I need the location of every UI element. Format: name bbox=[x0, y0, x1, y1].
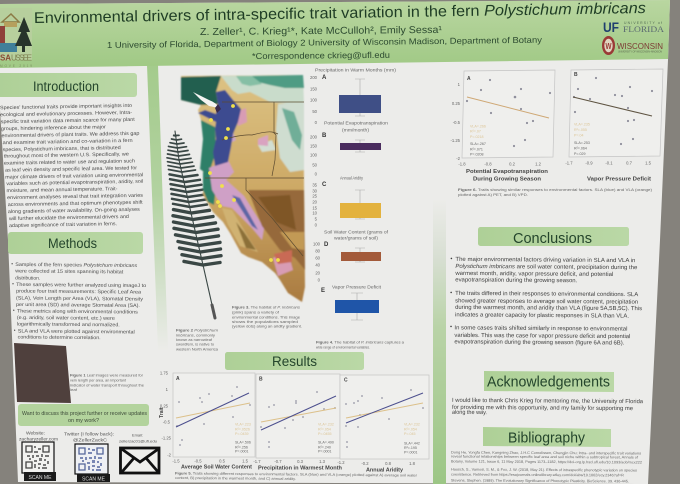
text block: introduction: along gradients of water availability. On-going analyses bbox=[8, 207, 140, 215]
text block: acknowledgements: along the way. bbox=[452, 410, 487, 416]
panel A: A bbox=[467, 76, 471, 82]
correspondence: *Correspondence ckrieg@ufl.edu bbox=[252, 50, 390, 61]
text block: methods: (SLA), Vein Length per Area (VLA), Stomatal Density bbox=[16, 295, 144, 303]
figure 2: fern illustration bbox=[167, 131, 221, 318]
x axis ticks: 0.2 bbox=[509, 162, 516, 166]
text block: bibliography: coexistence. Retrieved from https://esajournals.onlinelibrary.wiley.com/doi/abs/10.1002/ecy.2346?af=R bbox=[451, 473, 624, 477]
box plot D: soil water: 80 bbox=[315, 248, 321, 254]
box plot B: PET: 150 bbox=[310, 144, 318, 148]
panel A: SLA=.506 bbox=[235, 440, 251, 444]
panel B bbox=[256, 374, 340, 458]
x axis ticks: -1.7 bbox=[565, 160, 573, 166]
x axis ticks: -1.8 bbox=[458, 162, 466, 166]
figure 1 caption: Figure 1 Leaf images were measured for bbox=[70, 374, 144, 378]
x axis ticks: -0.8 bbox=[484, 162, 492, 166]
figure 5 caption: Figure 5. Traits showing different responses to environmental factors. SLA (blue) and VLA (orange) plotted against A) average soil water bbox=[175, 471, 418, 478]
text block: acknowledgements: I would like to thank Chris Krieg for mentoring me, the University of Florida bbox=[452, 398, 644, 405]
box plot C: aridity: 20 bbox=[312, 200, 318, 204]
panel A: VLA=.266 bbox=[470, 124, 486, 128]
text block: conclusions: The major environmental factors driving variation in SLA and VLA in bbox=[455, 257, 635, 264]
x axis ticks: -0.9 bbox=[585, 160, 593, 166]
heading: Results bbox=[225, 352, 364, 370]
figure 6 caption bbox=[458, 188, 652, 197]
panel C: P=.045 bbox=[404, 432, 416, 436]
text block: methods: (e.g. aridity, soil water content, etc.) were bbox=[17, 315, 115, 322]
box plot D: soil water: 40 bbox=[315, 262, 321, 268]
figure 4 caption bbox=[316, 340, 404, 350]
panel A: VLA=.223 bbox=[235, 422, 251, 426]
figure 2 caption: imbricans , commonly bbox=[176, 334, 215, 338]
box plot C: aridity: 25 bbox=[312, 194, 318, 198]
x axis ticks: -1.7 bbox=[253, 459, 261, 464]
text block: introduction: environmental drivers of plant traits. We address this gap bbox=[1, 131, 140, 139]
panel B: P=.029 bbox=[574, 152, 586, 156]
panel C: P=.0001 bbox=[404, 450, 418, 454]
box plot D: soil water bbox=[313, 230, 389, 282]
text block: methods: were collected at 15 sites spanning its habitat bbox=[15, 268, 124, 275]
figure 3 caption: (yellow dots) along an aridity gradient. bbox=[232, 324, 302, 328]
website label bbox=[19, 430, 58, 442]
pink habitat bbox=[209, 160, 264, 240]
email label: Email: bbox=[132, 432, 143, 438]
puget sound bbox=[193, 92, 219, 108]
box plot D: soil water: 0 bbox=[318, 278, 321, 282]
heading: Conclusions bbox=[478, 227, 629, 247]
text block: introduction: groups, hindering inference about the major bbox=[1, 124, 106, 132]
text block: methods: logarithmically transformed and normalized. bbox=[17, 321, 120, 328]
text block: bibliography: Stevens, Stephen. (1989). The Evolutionary Significance of Phenotypic Plasticity. BioScience. 39. 436-445. bbox=[451, 479, 629, 483]
twitter label: @ZellerZackC bbox=[73, 438, 108, 442]
figure 4 caption: Figure 4. The habitat of P. imbricans captures a bbox=[316, 340, 404, 344]
panel A: P=.0001 bbox=[235, 450, 248, 454]
website label: zacharyzeller.com bbox=[19, 436, 58, 442]
pale high plateau bbox=[276, 102, 304, 172]
heading: Bibliography: Bibliography bbox=[508, 430, 586, 446]
box plot D: soil water: 60 bbox=[315, 256, 321, 260]
Wisconsin logo: UNIVERSITY OF WISCONSIN–MADISON bbox=[618, 50, 662, 54]
QR code twitter bbox=[75, 444, 110, 482]
header band bbox=[0, 0, 670, 68]
website label: Website: bbox=[26, 430, 45, 436]
figure 3 caption: Figure 3. The habitat of P. imbricans bbox=[232, 306, 300, 310]
figure 3 caption: (pink) spans a variety of bbox=[232, 310, 279, 314]
x axis titles: Vapor Pressure Deficit bbox=[587, 176, 651, 182]
green column stripe right bbox=[433, 200, 446, 484]
panel C: R²=.195 bbox=[404, 446, 417, 450]
panel A: R²=.256 bbox=[235, 446, 248, 450]
x axis ticks: 0.7 bbox=[626, 160, 633, 166]
text block: conclusions: evapotranspiration during the growing season (figure 6A and 6B). bbox=[454, 339, 625, 347]
Wisconsin logo bbox=[602, 36, 663, 55]
text block: introduction: and examine trait variation and co-variation in a fern bbox=[3, 138, 133, 146]
x axis ticks: 0.5 bbox=[219, 458, 226, 464]
figure 5: trait regressions bbox=[159, 370, 429, 474]
panel B: SLA=.253 bbox=[574, 141, 590, 145]
green column stripe left bbox=[147, 65, 168, 350]
x axis titles: During Growing Season bbox=[473, 176, 541, 182]
figure 1 caption: vein length per area, an important bbox=[70, 378, 126, 382]
text block: methods: These samples were further analyzed using imageJ to bbox=[16, 282, 146, 289]
text block: conclusions: variables. This was the case for vapor pressure deficit and potential bbox=[454, 333, 630, 340]
box plot B: PET bbox=[310, 120, 389, 176]
y axis: Trait bbox=[159, 407, 165, 418]
email label: zellerzac01@ufl.edu bbox=[119, 438, 157, 444]
box plot D: soil water: 20 bbox=[315, 270, 321, 276]
text block: conclusions: • bbox=[450, 256, 452, 262]
panel A: R²=.07 bbox=[470, 130, 481, 134]
figure 2 caption: swordfern, is native to bbox=[176, 342, 214, 346]
conference logo: USSEE bbox=[11, 54, 32, 62]
y axis: -0.5 bbox=[453, 120, 461, 125]
state borders bbox=[205, 102, 304, 256]
box plot D: soil water: Soil Water Content (grams of bbox=[324, 230, 389, 234]
box plot A: precipitation: 150 bbox=[310, 86, 318, 92]
y axis: 1.75 bbox=[160, 370, 169, 376]
box plot E: VPD: Vapor Pressure Deficit bbox=[332, 284, 382, 290]
text block: acknowledgements: for providing me with this opportunity, and my family for supporting me bbox=[452, 405, 633, 412]
conference logo: SA bbox=[0, 54, 11, 62]
UF logo: UNIVERSITY of bbox=[624, 21, 662, 25]
x axis ticks: -0.5 bbox=[194, 458, 202, 464]
figure 2 caption: Figure 2 Polystichum bbox=[176, 328, 218, 332]
x axis ticks: 0.3 bbox=[297, 459, 304, 464]
y axis: 1 bbox=[166, 387, 169, 392]
text block: introduction: will further elucidate the environmental drivers and bbox=[9, 214, 129, 222]
figure 3 caption: environmental conditions. This image bbox=[232, 316, 300, 320]
x axis ticks: 1.3 bbox=[319, 459, 326, 464]
panel A bbox=[462, 70, 555, 158]
panel B: R²=.064 bbox=[574, 146, 587, 150]
text block: introduction: throughout most of the western U.S. Specifically, we bbox=[4, 151, 129, 160]
text block: acknowledgements bbox=[452, 398, 644, 417]
text block: introduction: examine traits related to water use and regulation such bbox=[4, 158, 135, 167]
x axis ticks: 1.8 bbox=[409, 461, 416, 466]
x axis ticks: -0.7 bbox=[274, 459, 282, 464]
text block: conclusions: • bbox=[450, 290, 452, 296]
panel A: R²=.0526 bbox=[235, 428, 250, 432]
navy wet habitat bbox=[198, 90, 241, 166]
text block: methods: Samples of the fern species Polystichum imbricans bbox=[15, 262, 138, 269]
figure 4 caption: wide range of environmental variables. bbox=[316, 346, 370, 350]
box plot A: precipitation: 200 bbox=[310, 75, 318, 80]
text block: conclusions: during the warmest month, and aridity than VLA (figure 5A,5B,5C). This bbox=[455, 305, 642, 312]
x axis titles: Average Soil Water Content bbox=[181, 464, 252, 470]
figure 5 caption: content, B) precipitation in the warmest month, and C) annual aridity. bbox=[175, 476, 296, 481]
figure 2 caption bbox=[176, 328, 218, 352]
panel B: P=.0001 bbox=[318, 450, 332, 454]
x axis ticks: 1.5 bbox=[242, 458, 249, 464]
panel B: P=.04 bbox=[574, 134, 584, 138]
northern montane teal bbox=[251, 75, 304, 88]
y axis: -2 bbox=[167, 452, 172, 458]
panel A: P=.0218 bbox=[470, 135, 484, 139]
panel B: R²=.055 bbox=[574, 128, 587, 132]
box plot B: PET: 200 bbox=[310, 134, 318, 140]
figure 6 caption: plotted against A) PET, and B) VPD. bbox=[458, 193, 528, 197]
panel A: SLA=.267 bbox=[470, 142, 486, 146]
text block: introduction: major climate drivers of trait variation using environmental bbox=[5, 172, 143, 181]
x axis ticks: -0.2 bbox=[361, 461, 369, 466]
text block: conclusions: Polystichum imbricans are soil water content, precipitation during the bbox=[455, 264, 637, 271]
box plot D: soil water: water/grams of soil) bbox=[334, 236, 379, 240]
panel C bbox=[340, 375, 429, 459]
figure 1 caption bbox=[70, 374, 144, 392]
text block: introduction: species, Polystichum imbricans, that is distributed bbox=[3, 145, 121, 153]
text block: introduction: Species' functional traits provide important insights into bbox=[0, 103, 132, 111]
conference logo: MOVE 2019 bbox=[0, 64, 32, 68]
heading: Methods bbox=[8, 232, 143, 254]
email label bbox=[119, 432, 157, 444]
text block: methods: • bbox=[12, 281, 14, 287]
box plot C: aridity: C bbox=[322, 182, 327, 188]
twitter label: Twitter (I follow back): bbox=[64, 432, 114, 436]
text block: bibliography bbox=[451, 451, 642, 484]
twitter label bbox=[64, 432, 114, 442]
box plot C: aridity bbox=[312, 176, 381, 228]
text block: conclusions: • bbox=[450, 324, 452, 330]
figure 3 caption bbox=[232, 306, 302, 328]
x axis ticks bbox=[172, 458, 416, 466]
figure 2 caption: known as narrowleaf bbox=[176, 338, 212, 342]
panel B: B bbox=[259, 376, 263, 382]
text block: introduction: adaptive significance of trait variation in ferns. bbox=[9, 221, 117, 229]
y axis: 0.25 bbox=[160, 404, 169, 408]
x axis titles: Precipitation in Warmest Month bbox=[258, 466, 342, 472]
figure 6: similar responses bbox=[450, 69, 663, 182]
figure 5 caption bbox=[175, 471, 418, 482]
callout: want to discuss: on my work? bbox=[68, 418, 99, 424]
figure 1: leaf image bbox=[14, 343, 71, 403]
box plot A: precipitation bbox=[310, 68, 397, 125]
pale northern margin bbox=[221, 75, 304, 105]
figure 1 caption: indicator of water transport throughout the bbox=[70, 384, 144, 388]
x axis ticks bbox=[458, 160, 652, 166]
text block: methods: conditions to determine correlation. bbox=[18, 334, 101, 341]
box plot E: VPD: E bbox=[321, 288, 325, 294]
text block: methods: These metrics along with environmental conditions bbox=[17, 308, 138, 316]
box plot B: PET: Potential Evapotranspiration bbox=[324, 120, 389, 126]
text block: methods: • bbox=[14, 328, 16, 334]
x axis ticks: -1.5 bbox=[172, 458, 180, 464]
heading: Introduction: Introduction bbox=[33, 79, 99, 94]
panel B: VLA=.232 bbox=[318, 422, 334, 426]
panel B: SLA=.490 bbox=[318, 440, 334, 444]
panel C: C bbox=[344, 378, 348, 384]
heading: Acknowledgements: Acknowledgements bbox=[487, 374, 610, 390]
callout: want to discuss bbox=[18, 404, 149, 426]
UF logo: UF bbox=[603, 19, 619, 35]
UF logo: FLORIDA bbox=[623, 24, 665, 34]
text block: conclusions: The traits differed in their responses to environmental conditions. SLA bbox=[455, 291, 638, 298]
box plot D: soil water: 100 bbox=[313, 242, 321, 246]
figure 2 caption: western North America bbox=[176, 348, 218, 352]
text block: methods: produce four trait measurements: Specific Leaf Area bbox=[16, 288, 141, 296]
x axis ticks: -1.2 bbox=[337, 460, 345, 465]
Wisconsin logo: W bbox=[606, 42, 612, 51]
box plot B: PET: B bbox=[322, 133, 327, 139]
text block: introduction: across environments and that optimum phenotypes shift bbox=[8, 200, 143, 208]
panel C: VLA=.232 bbox=[404, 422, 420, 426]
box plot C: aridity: Annual Aridity bbox=[340, 176, 364, 180]
text block: introduction: variables such as potential evapotranspiration, aridity, soil bbox=[6, 179, 143, 187]
title: Environmental drivers of intra-specific trait variation in the fern Polystichum imbricans bbox=[34, 0, 646, 27]
affiliations: 1 University of Florida, Department of Biology 2 University of Wisconsin Madison, Department of Botany bbox=[107, 35, 543, 50]
text block: conclusions: evapotranspiration during the growing season. bbox=[455, 277, 578, 284]
text block: bibliography: Botany, Volume 121, Issue 6, 11 May 2018, Pages 1173–1182, https://doi-org.lp.hscl.ufl.edu/10.1093/aob/mcx222 bbox=[451, 460, 642, 465]
figure 3: habitat map bbox=[181, 75, 305, 302]
text block: methods: distribution. bbox=[15, 275, 40, 282]
text block: introduction: ecological and evolutionary processes. However, Intra- bbox=[0, 110, 133, 118]
box plot B: PET: 50 bbox=[312, 162, 318, 168]
box plot B: PET: 0 bbox=[315, 172, 318, 176]
y axis bbox=[450, 82, 461, 161]
x axis titles: Potential Evapotranspiration bbox=[466, 169, 548, 175]
box plot B: PET: (mm/month) bbox=[342, 128, 370, 132]
y axis bbox=[159, 370, 172, 458]
figure 3 caption: shows the populations sampled bbox=[232, 320, 298, 324]
panel B: VLA=.235 bbox=[574, 122, 590, 126]
box plot A: precipitation: A bbox=[322, 75, 327, 81]
land base bbox=[181, 75, 305, 302]
x axis titles: Annual Aridity bbox=[366, 468, 403, 474]
panel B: B bbox=[574, 72, 578, 78]
y axis: -1.25 bbox=[161, 436, 172, 440]
panel A bbox=[173, 373, 255, 457]
box plot A: precipitation: 50 bbox=[312, 109, 318, 114]
text block: bibliography: reveal functional relationships between specific leaf area and soil niche within a subtropical forest, Annals of bbox=[451, 455, 638, 459]
panel C: R²=.054 bbox=[404, 428, 417, 432]
heading: Bibliography bbox=[483, 427, 611, 447]
figure 6 caption: Figure 6. Traits showing similar responses to environmental factors. SLA (blue) and VLA (orange) bbox=[458, 188, 652, 192]
panel B: P=.0455 bbox=[318, 432, 332, 436]
QR code website: SCAN ME bbox=[28, 475, 52, 481]
heading: Methods: Methods bbox=[48, 236, 97, 251]
text block: introduction: environment analyses reveal that trait integration varies bbox=[7, 193, 144, 201]
figure 4: environmental box plots bbox=[310, 68, 397, 320]
box plot D: soil water: D bbox=[324, 242, 329, 248]
QR code website bbox=[22, 442, 56, 481]
text block: methods: SLA and VLA were plotted against environmental bbox=[18, 328, 135, 335]
panel B: R²=.054 bbox=[318, 428, 331, 432]
Wisconsin logo: WISCONSIN bbox=[617, 42, 663, 51]
y axis: 0.25 bbox=[452, 101, 461, 106]
box plot A: precipitation: Precipitation in Warm Months (mm) bbox=[315, 68, 397, 72]
box plot C: aridity: 10 bbox=[312, 210, 318, 216]
y axis: -2 bbox=[456, 156, 461, 161]
x axis titles bbox=[181, 464, 403, 474]
text block: methods bbox=[11, 261, 147, 342]
box plot A: precipitation: 0 bbox=[315, 120, 318, 125]
box plot C: aridity: 5 bbox=[315, 216, 318, 222]
box plot C: aridity: 35 bbox=[312, 182, 318, 188]
y axis: -1.25 bbox=[450, 138, 461, 143]
heading: Introduction bbox=[0, 73, 137, 97]
box plot C: aridity: 0 bbox=[315, 222, 318, 228]
x axis ticks: -0.1 bbox=[605, 160, 613, 166]
central valley and southwest desert bbox=[222, 208, 258, 252]
text block: conclusions: showed greater responses to average soil water content, precipitation bbox=[455, 298, 638, 306]
panel A: P=.0439 bbox=[235, 432, 248, 436]
authors: Z. Zeller¹, C. Krieg¹*, Kate McCulloh², Emily Sessa¹ bbox=[200, 25, 443, 38]
text block: conclusions: indicates a greater capacity for plastic responses in SLA than VLA. bbox=[455, 312, 629, 320]
x axis ticks: 1.2 bbox=[535, 162, 542, 166]
heading: Results: Results bbox=[272, 353, 317, 369]
text block: introduction bbox=[0, 103, 144, 229]
QR code twitter: SCAN ME bbox=[82, 476, 106, 482]
text block: methods: • bbox=[11, 261, 13, 267]
panel A: R²=.071 bbox=[470, 148, 483, 152]
panel B: R²=.240 bbox=[318, 446, 331, 450]
x axis ticks: 1.5 bbox=[645, 160, 652, 166]
panel A: P=.0208 bbox=[470, 152, 484, 156]
text block: conclusions: In some cases traits shifted similarly in response to environmental bbox=[454, 325, 627, 333]
box plot C: aridity: 30 bbox=[312, 188, 318, 194]
panel C: SLA=.442 bbox=[404, 442, 420, 446]
icon: email envelope bbox=[120, 448, 159, 473]
text block: introduction: specific trait variation data remain scarce for many plant bbox=[1, 117, 135, 125]
figure 1 caption: leaf bbox=[70, 388, 77, 392]
x axis ticks: 0.8 bbox=[385, 461, 392, 466]
text block: conclusions: warmest month, aridity, vapor pressure deficit, and potential bbox=[454, 271, 613, 278]
box plot C: aridity: 15 bbox=[312, 206, 318, 210]
y axis: 1 bbox=[458, 82, 461, 87]
callout: want to discuss: Want to discuss this project further or receive updates bbox=[22, 411, 147, 417]
sampled populations bbox=[208, 104, 280, 262]
panel A: A bbox=[176, 376, 180, 382]
text block: methods: per unit area (SD) and average Stomatal Area (SA). bbox=[16, 302, 140, 309]
coastal forest green bbox=[181, 76, 221, 105]
heading: Conclusions: Conclusions bbox=[513, 230, 592, 247]
y axis: -0.5 bbox=[163, 420, 171, 424]
text block: bibliography: Hausch, S., Vamosi, S. M., & Fox, J. W. (2018, May 21). Effects of intraspecific phenotypic variation on species bbox=[451, 468, 637, 472]
text block: introduction: moisture, and mean annual temperature. Trait- bbox=[6, 186, 118, 194]
text block: conclusions bbox=[450, 256, 643, 347]
conference logo bbox=[0, 8, 32, 68]
UF logo bbox=[603, 19, 665, 35]
box plot A: precipitation: 100 bbox=[310, 98, 318, 102]
panel B bbox=[569, 69, 663, 157]
text block: introduction: as leaf vein density and specific leaf area. We tested for bbox=[5, 165, 137, 174]
text block: methods: • bbox=[13, 308, 15, 314]
text block: bibliography: Dong He, Yongfa Chen, Kangning Zhao, J.H.C Cornelissen, Chengjin Chu; Intra- and interspecific trait variations bbox=[451, 451, 641, 456]
x axis titles bbox=[466, 169, 651, 182]
box plot E: VPD bbox=[321, 284, 382, 320]
box plot B: PET: 100 bbox=[310, 152, 318, 158]
